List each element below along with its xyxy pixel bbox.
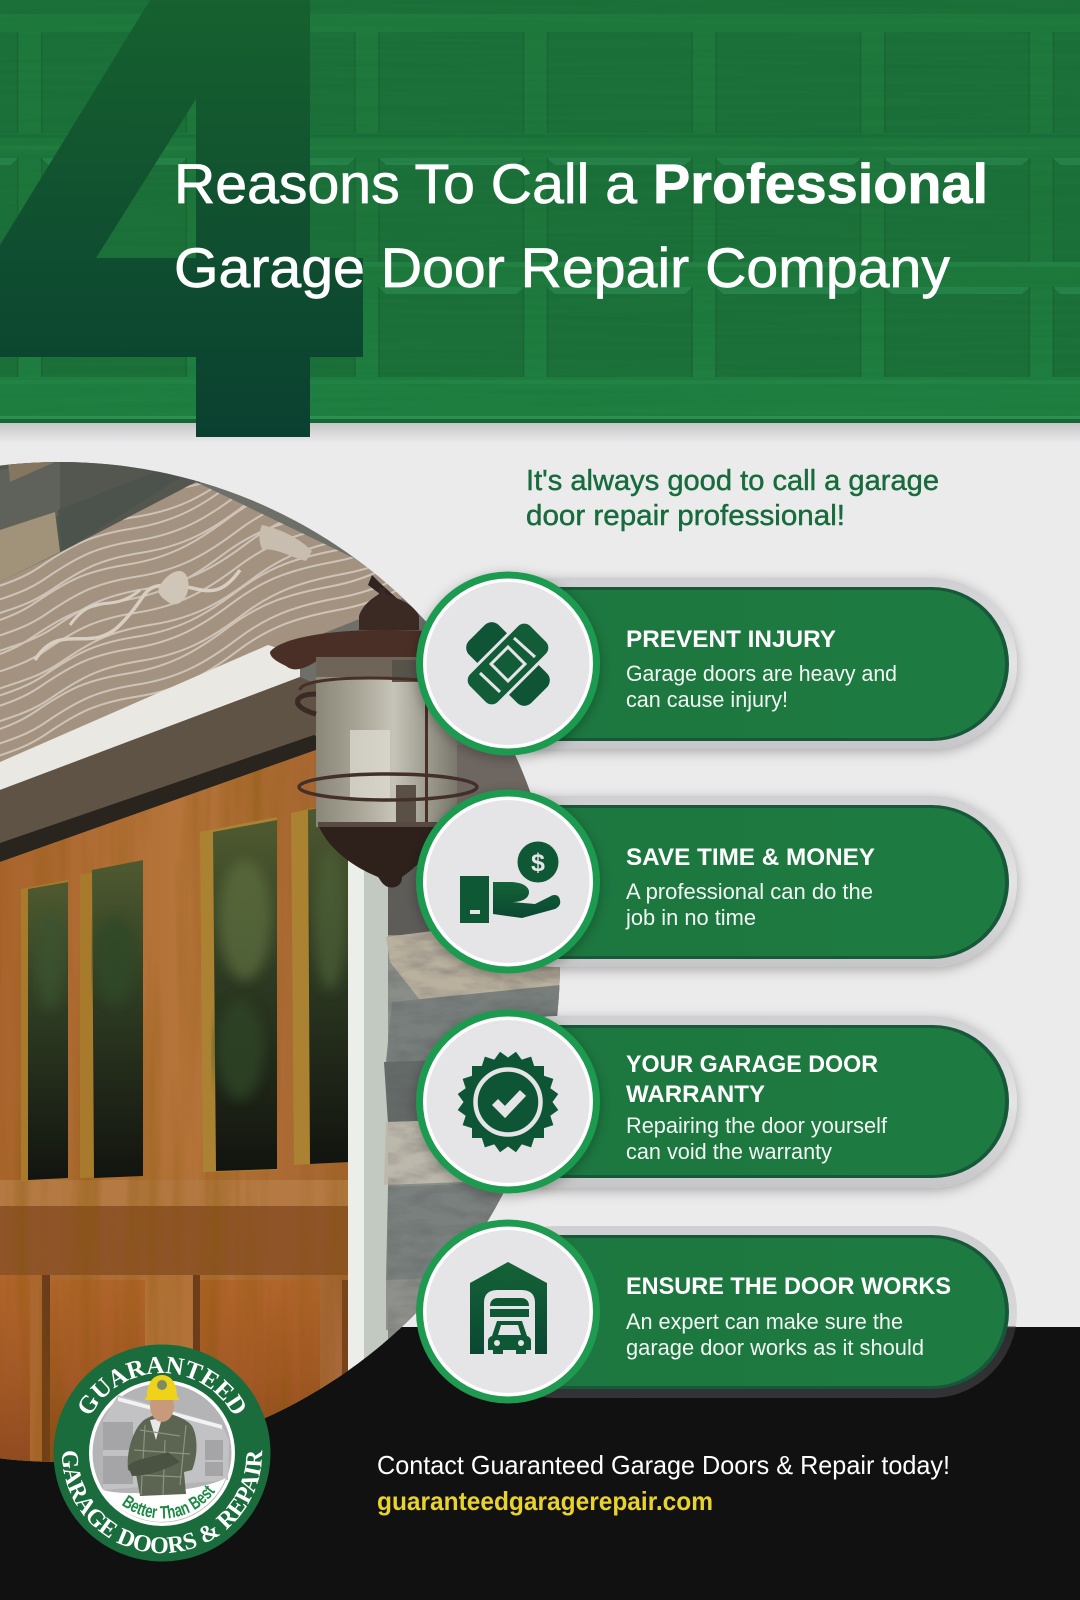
header panel with garage door texture	[0, 0, 1080, 443]
pill background	[470, 1226, 1017, 1398]
wood grain	[0, 745, 350, 1475]
logo badge: Better Than Best	[122, 1485, 216, 1518]
door panels	[0, 32, 1080, 133]
text: prevent injury: Garage doors are heavy and	[626, 661, 897, 686]
big numeral 4	[0, 0, 363, 437]
icon circle	[416, 572, 600, 756]
subtitle: door repair professional!	[526, 500, 845, 532]
contact text: Contact Guaranteed Garage Doors & Repair today!	[377, 1450, 950, 1480]
text: warranty: WARRANTY	[626, 1081, 765, 1108]
text: warranty: Repairing the door yourself	[626, 1113, 888, 1138]
text: save time: SAVE TIME & MONEY	[626, 844, 875, 871]
panel: save time and money	[416, 790, 1017, 974]
icon circle	[416, 1220, 600, 1404]
lower rail	[0, 1206, 350, 1275]
man with hard hat	[128, 1375, 196, 1496]
title: Reasons To Call a	[174, 152, 638, 215]
lantern	[270, 575, 477, 888]
logo badge	[54, 1344, 270, 1562]
text: save time	[625, 844, 875, 930]
white column	[348, 860, 364, 1371]
text: prevent injury	[626, 626, 897, 712]
title: Garage Door Repair Company	[174, 236, 950, 299]
contact text: guaranteedgaragerepair.com	[377, 1486, 713, 1516]
icon: warranty badge	[458, 1052, 558, 1152]
panel: ensure door works	[416, 1220, 1017, 1404]
white fascia	[0, 645, 300, 790]
white lower band	[103, 1478, 226, 1522]
pill background	[470, 578, 1017, 749]
footer black band	[0, 1327, 1080, 1600]
stone wall	[384, 865, 560, 1340]
wooden beam	[0, 482, 403, 762]
wood knot	[158, 571, 188, 604]
text: ensure door works: ENSURE THE DOOR WORKS	[626, 1273, 951, 1300]
icon circle	[416, 790, 600, 974]
icon circle	[416, 1010, 600, 1194]
icon: garage with car	[470, 1262, 547, 1354]
door windows	[21, 800, 350, 1181]
pill background	[470, 1016, 1017, 1188]
garage door in logo	[103, 1395, 229, 1490]
text: ensure door works	[626, 1273, 951, 1360]
subtitle	[526, 465, 939, 532]
text: warranty: can void the warranty	[626, 1139, 833, 1164]
pill background	[470, 796, 1017, 967]
subtitle: It's always good to call a garage	[526, 465, 939, 497]
text: ensure door works: An expert can make sure the	[626, 1309, 903, 1334]
lower panels	[0, 1275, 350, 1470]
panel: prevent injury	[416, 572, 1017, 756]
stone behind lantern	[457, 745, 530, 804]
text: prevent injury: PREVENT INJURY	[626, 626, 836, 653]
text: warranty	[626, 1051, 888, 1164]
contact text	[377, 1450, 950, 1516]
icon: bandage	[462, 618, 554, 710]
panel: warranty	[416, 1010, 1017, 1194]
logo ring text: GUARANTEED	[79, 1356, 245, 1414]
title: Professional	[653, 152, 988, 215]
text: ensure door works: garage door works as it should	[626, 1335, 924, 1360]
text: prevent injury: can cause injury!	[626, 687, 788, 712]
logo badge: GARAGE DOORS & REPAIR	[62, 1450, 262, 1554]
icon: money in hand	[460, 842, 560, 923]
title	[174, 152, 988, 299]
icon: money in hand: $	[531, 849, 545, 877]
text: save time: A professional can do the	[626, 879, 873, 904]
wood grain	[0, 0, 1080, 416]
stone wall above the beam	[0, 460, 200, 590]
text: warranty: YOUR GARAGE DOOR	[626, 1051, 878, 1078]
wooden door	[0, 745, 350, 1475]
photo: garage door and lantern in circle	[0, 462, 560, 1462]
soffit	[0, 677, 330, 850]
text: save time: job in no time	[625, 905, 756, 930]
